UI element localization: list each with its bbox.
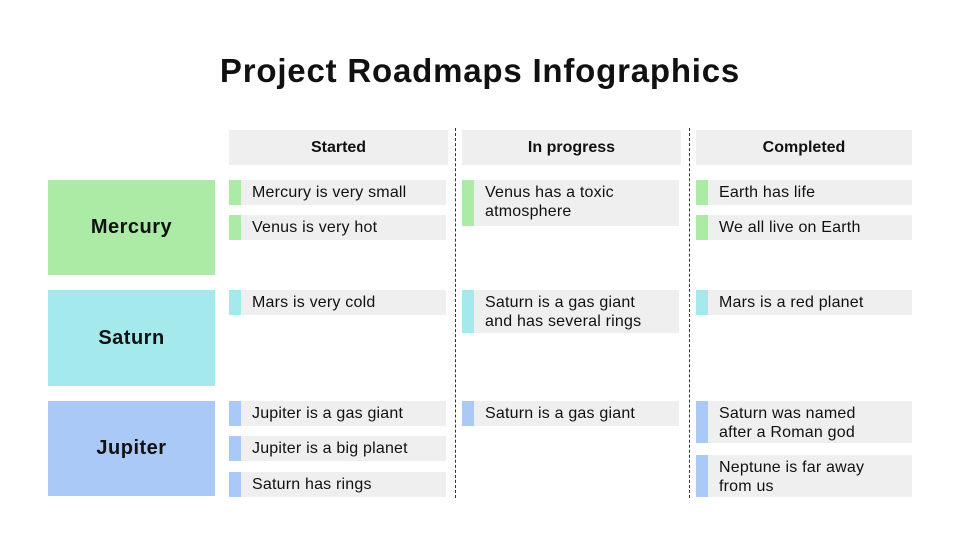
card [696, 215, 912, 240]
row label: Saturn: Saturn [98, 326, 165, 348]
card [229, 290, 446, 315]
row label: Mercury [48, 180, 215, 275]
card: Earth has life [719, 184, 815, 201]
card [229, 436, 446, 461]
card [462, 401, 679, 426]
card: Mercury is very small [252, 184, 406, 201]
card: from us [719, 478, 774, 495]
header: in progress [462, 130, 681, 165]
card: Saturn is a gas giant [485, 294, 635, 311]
header: in progress: In progress [528, 138, 615, 156]
card: Jupiter is a big planet [252, 440, 408, 457]
title: Project Roadmaps Infographics [220, 52, 740, 89]
card [229, 401, 446, 426]
card [229, 180, 446, 205]
card [696, 180, 912, 205]
row label: Jupiter: Jupiter [96, 437, 167, 459]
card: We all live on Earth [719, 219, 861, 236]
card [229, 472, 446, 497]
card [696, 290, 912, 315]
card [696, 455, 912, 497]
card: Saturn has rings [252, 476, 372, 493]
card [462, 290, 679, 333]
card [229, 215, 446, 240]
card: Mars is very cold [252, 294, 375, 311]
card: Venus is very hot [252, 219, 377, 236]
card: Mars is a red planet [719, 294, 864, 311]
header: completed: Completed [763, 138, 845, 156]
row label: Saturn [48, 290, 215, 386]
card [462, 180, 679, 226]
card: and has several rings [485, 313, 641, 330]
card: atmosphere [485, 203, 572, 220]
row label: Jupiter [48, 401, 215, 496]
row label: Mercury: Mercury [91, 216, 172, 238]
header: completed [696, 130, 912, 165]
card: Saturn was named [719, 405, 856, 422]
header: started [229, 130, 448, 165]
card: after a Roman god [719, 424, 855, 441]
card [696, 401, 912, 443]
card: Neptune is far away [719, 459, 864, 476]
card: Saturn is a gas giant [485, 405, 635, 422]
header: started: Started [311, 138, 366, 156]
card: Jupiter is a gas giant [252, 405, 403, 422]
card: Venus has a toxic [485, 184, 614, 201]
